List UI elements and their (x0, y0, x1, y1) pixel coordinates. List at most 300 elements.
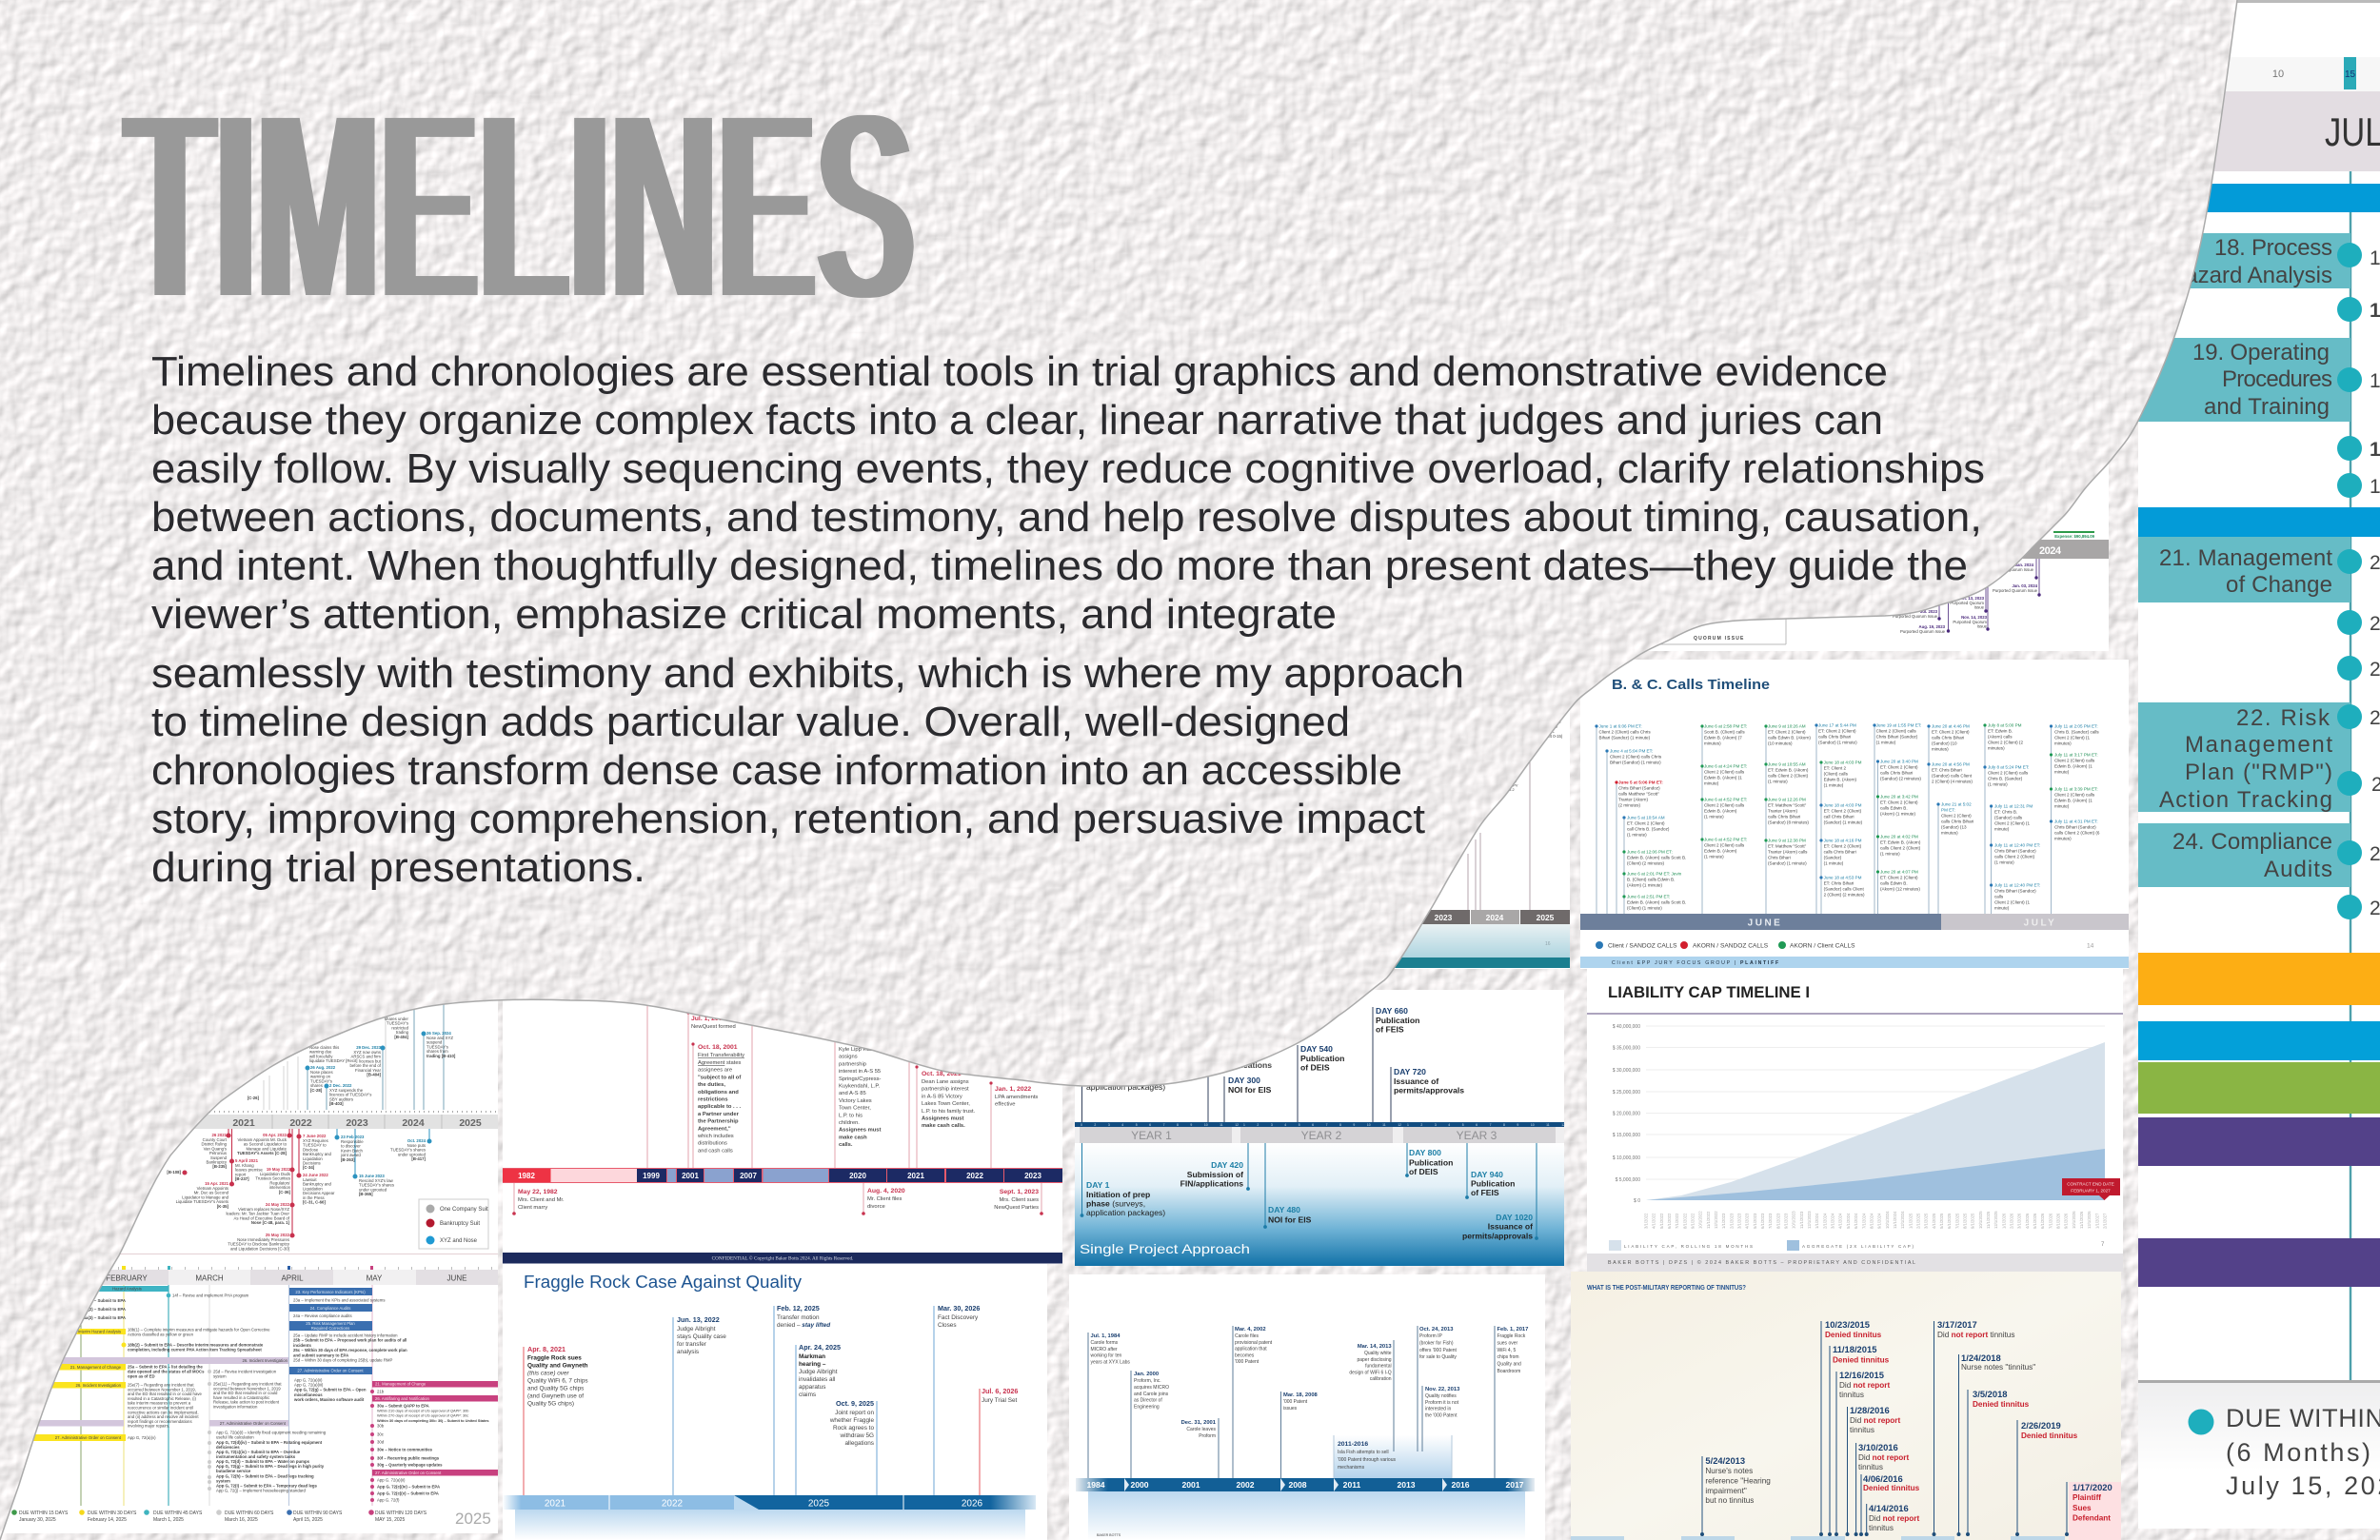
deliverable text: App G, 72(g) – Submit to EPA – Open (294, 1388, 367, 1392)
call entries: Bihari (Sandoz) (1 minute) (1599, 735, 1651, 740)
events: Transfer motion (777, 1314, 820, 1321)
report entries: Denied tinnitus (1825, 1331, 1882, 1339)
year band: YEAR 3 (1457, 1129, 1497, 1142)
call entries: June 6 at 2:58 PM ET: (1704, 723, 1747, 729)
chart legend: 7 (2101, 1242, 2105, 1248)
lower events text: Bankruptcy and (303, 1182, 331, 1187)
call entries: Client 2 (Client) calls (1704, 843, 1745, 847)
year band: 1 2 3 4 5 6 7 8 9 10 11 12 (1243, 1123, 1401, 1127)
deliverable text (55, 1287, 489, 1502)
call entries: ET: Client 2 (Client) (1880, 876, 1918, 879)
events above band: the duties, (698, 1082, 725, 1088)
call entries: Edwin B. (Akorn) (1 (1704, 775, 1742, 780)
lower events text: Manage and Liquidate (246, 1146, 288, 1151)
call entries: June 18 at 4:03 PM (1824, 803, 1862, 807)
events above band: obligations and (698, 1090, 739, 1096)
events: Quality notifies (1425, 1393, 1457, 1399)
month header: JUNE (447, 1273, 466, 1283)
call entries: June 6 at 2:01 PM ET: Jevin (1627, 872, 1682, 876)
upper events text: Nose places (310, 1070, 333, 1075)
call entries: Scott B. (Client) calls (1704, 729, 1745, 735)
deliverable text: App G, 72(a)(ii) (294, 1378, 322, 1382)
events: Quality and Gwyneth (527, 1363, 588, 1369)
deliverable text: 30d (377, 1439, 385, 1445)
report entries: tinnitus (1869, 1524, 1894, 1532)
events: Quality white (1364, 1351, 1392, 1356)
x axis dates: 12/1/2022 (1714, 1211, 1718, 1229)
deliverable text: App G. 72(c)(iv) – Submit to EPA (377, 1485, 440, 1489)
events: (and Gwyneth use of (527, 1393, 584, 1399)
call entries: Chris Bihari (Sandoz) (1994, 849, 2036, 853)
call entries: Client 2 (Client) calls (1704, 803, 1745, 807)
lower events text: 23 Feb 2023 (341, 1135, 365, 1139)
call entries: Client 2 (Client) (1 (1994, 900, 2030, 904)
call entries: July 11 at 12:40 PM ET: (1994, 843, 2040, 847)
events below band: Mr. Client files (867, 1196, 902, 1202)
deliverable text: 15a(3) – Submit to EPA (81, 1315, 126, 1320)
deliverable text: App G, 72(i) – Submit to EPA – Temporary dead legs (216, 1483, 318, 1489)
events: Jul. 6, 2026 (982, 1387, 1018, 1395)
x axis dates: 2/1/2024 (1822, 1213, 1827, 1229)
teal category boxes: 18. Process (2214, 235, 2332, 261)
deliverable text: incidents (293, 1343, 311, 1348)
quorum events: Jan. 03, 2024 (2012, 583, 2038, 588)
call entries: (Akorn) calls (1988, 735, 2013, 739)
events: claims (799, 1392, 816, 1398)
events: application that (1235, 1347, 1267, 1352)
events: Quality WiFi 6, 7 chips (527, 1378, 588, 1384)
events: for sale to Quality (1419, 1354, 1457, 1360)
events: Quality and (1497, 1362, 1521, 1368)
year band: YEAR 1 (1131, 1129, 1172, 1142)
lower events text: leaves premise (235, 1168, 264, 1173)
quorum events (1893, 563, 2038, 634)
call entries: (Sandoz) calls Client (1824, 887, 1864, 891)
deliverable text: 18b(1) – Complete interim measures and mitigate hazards for Open Corrective (128, 1327, 270, 1333)
events below band: Aug. 4, 2020 (867, 1188, 905, 1194)
lower milestones: FIN/applications (1180, 1179, 1243, 1189)
year band: 2011 (1343, 1480, 1361, 1490)
body text: first block (151, 348, 1985, 638)
upper events text: 26 Aug. 2022 (310, 1065, 336, 1070)
lower events text: as Second Liquidator to (244, 1142, 288, 1147)
deadline legend: 2025 (455, 1510, 491, 1528)
report entries: Defendant (2073, 1513, 2111, 1522)
report entries: tinnitus (1858, 1463, 1883, 1471)
upper events text: 29 Dec. 2023 (356, 1045, 382, 1050)
x axis dates: 4/1/2023 (1745, 1213, 1750, 1229)
events below band: Mrs. Client and Mr. (518, 1197, 565, 1203)
year band: 2000 (1130, 1480, 1149, 1490)
deliverable text: 30g – Quarterly webpage updates (377, 1462, 443, 1468)
heading: B. & C. Calls Timeline (1612, 677, 1770, 693)
deliverable text: Actions classified as yellow or green (128, 1333, 194, 1336)
x axis dates: 10/1/2026 (2072, 1211, 2076, 1229)
milestone labels (2370, 247, 2380, 919)
call entries: (1 minute) (1704, 815, 1724, 819)
body text: first block: easily follow. By visually sequencing events, they reduce cognitive overload, clarify relationships (151, 445, 1985, 492)
upper events text: warning on (310, 1075, 331, 1079)
call entries: (1 minute) (1988, 782, 2008, 786)
month header: MARCH (195, 1273, 224, 1283)
call entries: ET: Matthew "Scott" (1768, 843, 1807, 849)
deadline legend: DUE WITHIN 60 DAYS (225, 1510, 273, 1516)
deliverable text: App G. 72(c)(v) – Submit to EPA (377, 1491, 439, 1496)
upper events text: 2 Dec. 2022 (329, 1083, 352, 1088)
deliverable text: useful life calculation (216, 1435, 254, 1439)
2011-2016 highlight: mechanisms (1338, 1465, 1365, 1471)
lower events text: [B-417] (411, 1156, 426, 1161)
deadline legend: DUE WITHIN 45 DAYS (153, 1510, 202, 1516)
call entries: Chris B. (Sandoz) calls (2054, 729, 2099, 735)
lower milestones: Publication (1471, 1178, 1515, 1188)
x axis dates: 6/1/2026 (2040, 1213, 2045, 1229)
deliverable text: App G, 72(g) – Submit to EPA – Dead legs in high purity (216, 1464, 325, 1469)
deliverable text: 18b(2) – Submit to EPA – Describe interim measures and demonstrate (128, 1342, 263, 1348)
timeline band: 2007 (740, 1172, 757, 1180)
deliverable text: App G, 72(h) – Submit to EPA – Dead legs tracking (216, 1473, 314, 1479)
x axis dates: 2/1/2026 (2009, 1213, 2013, 1229)
deliverable text: App G, 72(a)(i) – Identify fixed equipment needing remaining (216, 1430, 326, 1435)
deliverable text: 23a – Implement the KPIs and associated systems (293, 1298, 385, 1302)
panel: patent history timeline: BAKER BOTTS (1097, 1533, 1121, 1537)
panel: quorum issue timeline: 2024 (2039, 545, 2062, 557)
report entries: Did not report (1850, 1416, 1900, 1425)
panel: 2025 deadlines chart (0, 1254, 498, 1533)
events below band: Mrs. Client sues (999, 1197, 1039, 1203)
events above band: calls. (839, 1142, 853, 1148)
events above band: Agreement states (698, 1060, 741, 1066)
2011-2016 highlight: Isla Fish attempts to sell (1338, 1450, 1389, 1455)
lower milestones: permits/approvals (1462, 1231, 1533, 1240)
report entries: Nurse notes "tinnitus" (1961, 1363, 2035, 1372)
lower events text: 05 Apr. 2022 (263, 1133, 288, 1137)
lower events text: [C-31, C-66] (303, 1199, 326, 1205)
call entries: calls Edwin B. (1880, 881, 1908, 885)
lower events text: [B-365] (359, 1192, 373, 1196)
upper events text: [C-26] (248, 1096, 260, 1100)
deadline legend: DUE WITHIN 15 DAYS (19, 1510, 68, 1516)
events: stays Quality case (677, 1333, 726, 1340)
call entries: call Chris B. (Sandoz) (1627, 826, 1670, 832)
call entries: Chris Bihari (Sandoz) (2054, 824, 2096, 830)
deliverable text: Within 30 days of completing 30b: 30j – Submit to United States (377, 1418, 489, 1423)
deliverable text: App G, 72(a)(v) (128, 1435, 156, 1440)
lower milestones: DAY 800 (1409, 1148, 1441, 1157)
deliverable text: 27. Administrative Order on Consent (375, 1471, 442, 1475)
year band: 2016 (1451, 1480, 1470, 1490)
events: (broker for Fish) (1419, 1340, 1454, 1346)
call entries: (1 minute) (1994, 860, 2014, 864)
lower events text: Kevin Batch (341, 1148, 364, 1153)
call entries: Client 2 (Client) calls (1988, 771, 2029, 775)
x axis dates: 8/1/2022 (1682, 1213, 1687, 1229)
callout: contract end date: FEBRUARY 1, 2027 (2071, 1188, 2111, 1194)
deliverable text: 14(1) – Submit to EPA (84, 1298, 126, 1303)
call entries: June 9 at 12:26 PM (1768, 798, 1806, 801)
panel: liability cap chart (1587, 969, 2123, 1272)
lower events text: Vietnam Appoints (197, 1186, 228, 1191)
call entries: June 20 at 4:56 PM (1932, 761, 1970, 767)
events above band: assignees are (698, 1068, 732, 1074)
deliverable text: App G. 72(a)(ii) (377, 1477, 406, 1483)
body text: second block: story, improving comprehension, retention, and persuasive impact (151, 796, 1425, 842)
x axis dates: 12/1/2023 (1807, 1211, 1812, 1229)
call entries: (1 minute) (1704, 855, 1724, 859)
call entries: ET: Matthew "Scott" (1768, 803, 1807, 807)
call entries: 2 (Client) (2 minutes) (1824, 893, 1865, 897)
events: Nov. 22, 2013 (1425, 1387, 1460, 1392)
call entries: (1 minute) (1824, 782, 1844, 788)
lower events text: [B-237] (235, 1176, 249, 1181)
body text: first block: viewer’s attention, emphasize critical moments, and integrate (151, 591, 1337, 638)
call entries: ET: Client 2 (Client) (1824, 809, 1862, 813)
x axis dates: 1/1/2023 (1721, 1213, 1726, 1229)
upper milestones: DAY 720 (1394, 1067, 1426, 1076)
client strip (1580, 957, 2129, 968)
events above band: restrictions (698, 1096, 728, 1102)
lower milestones: Publication (1409, 1157, 1453, 1167)
footer: BAKER BOTTS | DPZS | © 2024 BAKER BOTTS – PROPRIETARY AND CONFIDENTIAL (1608, 1259, 1915, 1266)
call entries: Client 2 (Client) calls Chris (1610, 754, 1662, 760)
events: calibration (1370, 1376, 1392, 1382)
lower events text: [C-34] (303, 1165, 315, 1170)
y axis labels: $ 25,000,000 (1613, 1090, 1640, 1096)
events: and Carole joins (1134, 1392, 1169, 1397)
events: Proform IP (1419, 1333, 1442, 1339)
events: fundamental (1365, 1364, 1392, 1370)
events: invalidates all (799, 1376, 835, 1383)
quorum events: Issue (1974, 605, 1985, 609)
heading: WHAT IS THE POST-MILITARY REPORTING OF TINNITUS? (1587, 1285, 1746, 1292)
body text: second block: chronologies transform dense case information into an accessible (151, 747, 1402, 794)
year band: 2017 (1505, 1480, 1524, 1490)
events above band: which includes (697, 1134, 734, 1139)
events (527, 1304, 1018, 1447)
call entries: June 6 at 4:52 PM ET: (1704, 798, 1747, 801)
events below band (518, 1188, 1039, 1211)
call entries: ET: Client 2 (Client) (1880, 765, 1918, 769)
upper events text: 26 Sep. 2024 (426, 1031, 451, 1036)
call entries: B. (Client) calls Edwin B. (1627, 878, 1675, 881)
teal category boxes: of Change (2226, 572, 2332, 598)
call entries: calls Matthew "Scott" (1618, 792, 1659, 796)
call entries: calls Chris Bihari (1941, 819, 1973, 824)
deliverable text: occurred between November 1, 2019 (213, 1386, 281, 1391)
lower events text: County Court (203, 1137, 228, 1142)
lower events text: District Ruling (201, 1142, 228, 1147)
lower milestones: DAY 480 (1268, 1205, 1300, 1214)
x axis dates: 4/1/2024 (1838, 1213, 1843, 1229)
call entries: ET: Chris Bihari (1932, 767, 1962, 773)
events: Mar. 4, 2002 (1235, 1327, 1266, 1333)
deliverable text: 25d – Within 30 days of completing 25(b), update RMP (293, 1357, 393, 1362)
lower events text: Responsible (341, 1139, 364, 1144)
x axis dates: 10/1/2023 (1792, 1211, 1796, 1229)
call entries: (Sandoz) (1824, 855, 1842, 860)
legend: XYZ and Nose (440, 1238, 478, 1244)
events above band: make cash calls. (922, 1123, 965, 1129)
teal category boxes (2138, 233, 2350, 887)
month band: JULY (2024, 918, 2056, 929)
year band: 2013 (1397, 1480, 1416, 1490)
year band: 2002 (1236, 1480, 1255, 1490)
events above band: Springs/Cypress- (839, 1076, 882, 1082)
lower events text: Liquidation Duds (260, 1172, 290, 1176)
upper events text: warning due (309, 1050, 332, 1055)
events: (this case) over (527, 1371, 570, 1376)
title: TIMELINES (125, 53, 915, 360)
upper events text: licenses but (359, 1058, 382, 1063)
upper events text: ARSCS and firm (350, 1055, 381, 1059)
deadline legend (11, 1510, 491, 1528)
call entries: Edwin B. (Akorn) calls Scott B. (1627, 855, 1686, 860)
upper events text: [B-404] (367, 1072, 382, 1077)
report entries: Denied tinnitus (1863, 1484, 1920, 1492)
x axis dates: 7/1/2023 (1768, 1213, 1773, 1229)
report entries (1705, 1319, 2112, 1532)
call entries: calls Edwin B. (Akorn) (1768, 735, 1811, 740)
x axis dates: 10/1/2024 (1885, 1211, 1890, 1229)
call entries: Client 2 (Client) (1 (1994, 820, 2030, 826)
lower events text: Decisions (303, 1161, 321, 1165)
deliverable text: 25e(11) – Regarding any incident that (213, 1382, 282, 1386)
quorum events: Purported Quorum (1953, 620, 1987, 624)
call entries: Edwin B. (Akorn) (1704, 849, 1737, 853)
deliverable text: resulted in a Catastrophic Release, (i) (128, 1396, 196, 1401)
heading: LIABILITY CAP TIMELINE I (1608, 983, 1810, 1001)
teal category boxes: 19. Operating (2192, 340, 2330, 365)
lower events text: under uprooted (398, 1152, 426, 1156)
call entries: ET: Client 2 (1824, 765, 1847, 771)
deliverable text: system (216, 1479, 230, 1483)
call entries: Edwin B. (Akorn) (1824, 777, 1857, 782)
events above band: effective (995, 1102, 1015, 1108)
call entries: calls Edwin B. (1880, 805, 1908, 811)
upper milestones: NOI for EIS (1228, 1085, 1272, 1095)
deadline legend: DUE WITHIN 30 DAYS (88, 1510, 136, 1516)
lower events text: Nose puts (407, 1143, 426, 1148)
x axis dates: 4/1/2022 (1652, 1213, 1656, 1229)
report entries: 1/24/2018 (1961, 1352, 2001, 1363)
upper milestones: application packages) (1086, 1082, 1165, 1092)
call entries: July 11 at 12:40 PM ET: (1994, 883, 2040, 887)
events: Fact Discovery (938, 1314, 978, 1321)
events above band: L.P. to his (839, 1113, 863, 1118)
quorum events: Purported Quorum Issue (1900, 629, 1946, 634)
events: whether Fraggle (829, 1417, 874, 1424)
x axis dates: 9/1/2026 (2064, 1213, 2069, 1229)
events: Carole files (1235, 1333, 1259, 1339)
upper milestones (1086, 1006, 1464, 1095)
lower milestones: Issuance of (1488, 1222, 1533, 1232)
report entries: 11/18/2015 (1833, 1344, 1876, 1354)
lower events text: Petronius (209, 1151, 227, 1155)
events above band: First Transferability (698, 1053, 744, 1058)
events: Feb. 1, 2017 (1497, 1327, 1528, 1333)
lower events text: 7 June 2022 (303, 1134, 327, 1138)
deliverable text: and submit summary to EPA (293, 1352, 348, 1357)
lower events text: 25 May 2022 (266, 1233, 290, 1237)
deliverable text: and the ED that resulted in or could (213, 1391, 278, 1395)
events: Judge Albright (799, 1369, 838, 1375)
x axis dates: 11/1/2025 (1986, 1211, 1991, 1229)
body text: first block: and intent. When thoughtfully designed, timelines do more than present dates—they guide the (151, 543, 1968, 589)
call entries: Edwin B. (Akorn) (7 (1704, 735, 1742, 740)
lower milestones: DAY 420 (1211, 1160, 1243, 1170)
y axis labels: $ 5,000,000 (1616, 1177, 1640, 1183)
upper milestones: DAY 660 (1376, 1006, 1408, 1016)
upper events text: Nose and XYZ (426, 1036, 453, 1040)
teal category boxes: 22. Risk (2236, 705, 2330, 731)
call legend: 14 (2087, 942, 2094, 950)
report entries: Did not report (1839, 1381, 1890, 1390)
upper events text: TUESDAY's (310, 1078, 332, 1083)
y axis labels: $ 35,000,000 (1613, 1045, 1640, 1051)
deliverable text: date opened and the status of all MOCs (128, 1369, 205, 1374)
upper events text: shares (310, 1083, 323, 1088)
events above band: Lakes Town Center, (922, 1101, 970, 1107)
call entries: Chris Bihari (Sandoz) (1994, 889, 2036, 893)
call entries: (Akorn) (1 minute) (1627, 883, 1662, 887)
quorum events: Purported Quorum Issue (1893, 614, 1938, 619)
month header: APRIL (281, 1273, 304, 1283)
report entries: 4/14/2016 (1869, 1503, 1909, 1513)
x axis dates: 8/1/2026 (2056, 1213, 2061, 1229)
quorum events: Purported Quorum Issue (1993, 588, 2038, 593)
call entries: Chris Bihari (1768, 855, 1791, 860)
lower events text: Suspend (210, 1155, 228, 1160)
call entries: (1 minute) (1876, 740, 1896, 744)
lower events text: TUESDAY's shares (359, 1183, 394, 1188)
events: becomes (1235, 1352, 1255, 1358)
y axis labels: $ 20,000,000 (1613, 1112, 1640, 1117)
upper events text: TUESDAY's (387, 1021, 408, 1026)
call entries: (Sandoz) (8 minutes) (1768, 820, 1809, 824)
events above band: "subject to all of (698, 1075, 741, 1080)
timeline band: 2001 (682, 1172, 699, 1180)
events above band: Dean Lane assigns (922, 1079, 969, 1085)
deliverable text: reoccurrence or similar incident until (128, 1405, 193, 1411)
call entries: minute) (2054, 769, 2070, 775)
lower events text: 15 June 2023 (359, 1174, 385, 1178)
quorum events: Jul. 2023 (1920, 609, 1938, 614)
events: sues over (1497, 1340, 1518, 1346)
y axis labels: $ 15,000,000 (1613, 1133, 1640, 1138)
events above band: make cash (839, 1135, 867, 1140)
upper events text: will forcefully (309, 1054, 333, 1058)
call entries: Tranter (Akorn) (1618, 798, 1648, 801)
panel: quorum issue timeline: QUORUM ISSUE (1694, 636, 1745, 642)
call entries: Client 2 (Client) (2 (1988, 740, 2023, 744)
lower events text: Rescind XYZ's law (359, 1178, 394, 1183)
lower events text: Liquidator to Manage and (182, 1194, 229, 1199)
call entries: calls (1994, 895, 2004, 898)
events: Fraggle Rock sues (527, 1355, 582, 1361)
panel: quorum issue timeline: Expense: $90,894.09 (2054, 534, 2095, 539)
body text: second block: during trial presentations. (151, 844, 645, 891)
deliverable text: miscellaneous (294, 1392, 323, 1397)
lower events text: As Head of Executive Board of (233, 1215, 290, 1220)
events: hearing – (799, 1361, 826, 1368)
x axis dates: 9/1/2024 (1877, 1213, 1882, 1229)
body text: first block: between actions, documents, and testimony, and help resolve disputes about timing, causation, (151, 494, 1982, 541)
lower events text: Trustees Securities (255, 1176, 290, 1181)
call entries: minutes) (1932, 746, 1949, 752)
lower milestones: DAY 940 (1471, 1170, 1503, 1179)
call entries: June 9 at 10:55 AM (1768, 761, 1806, 767)
lower milestones (1086, 1148, 1533, 1240)
